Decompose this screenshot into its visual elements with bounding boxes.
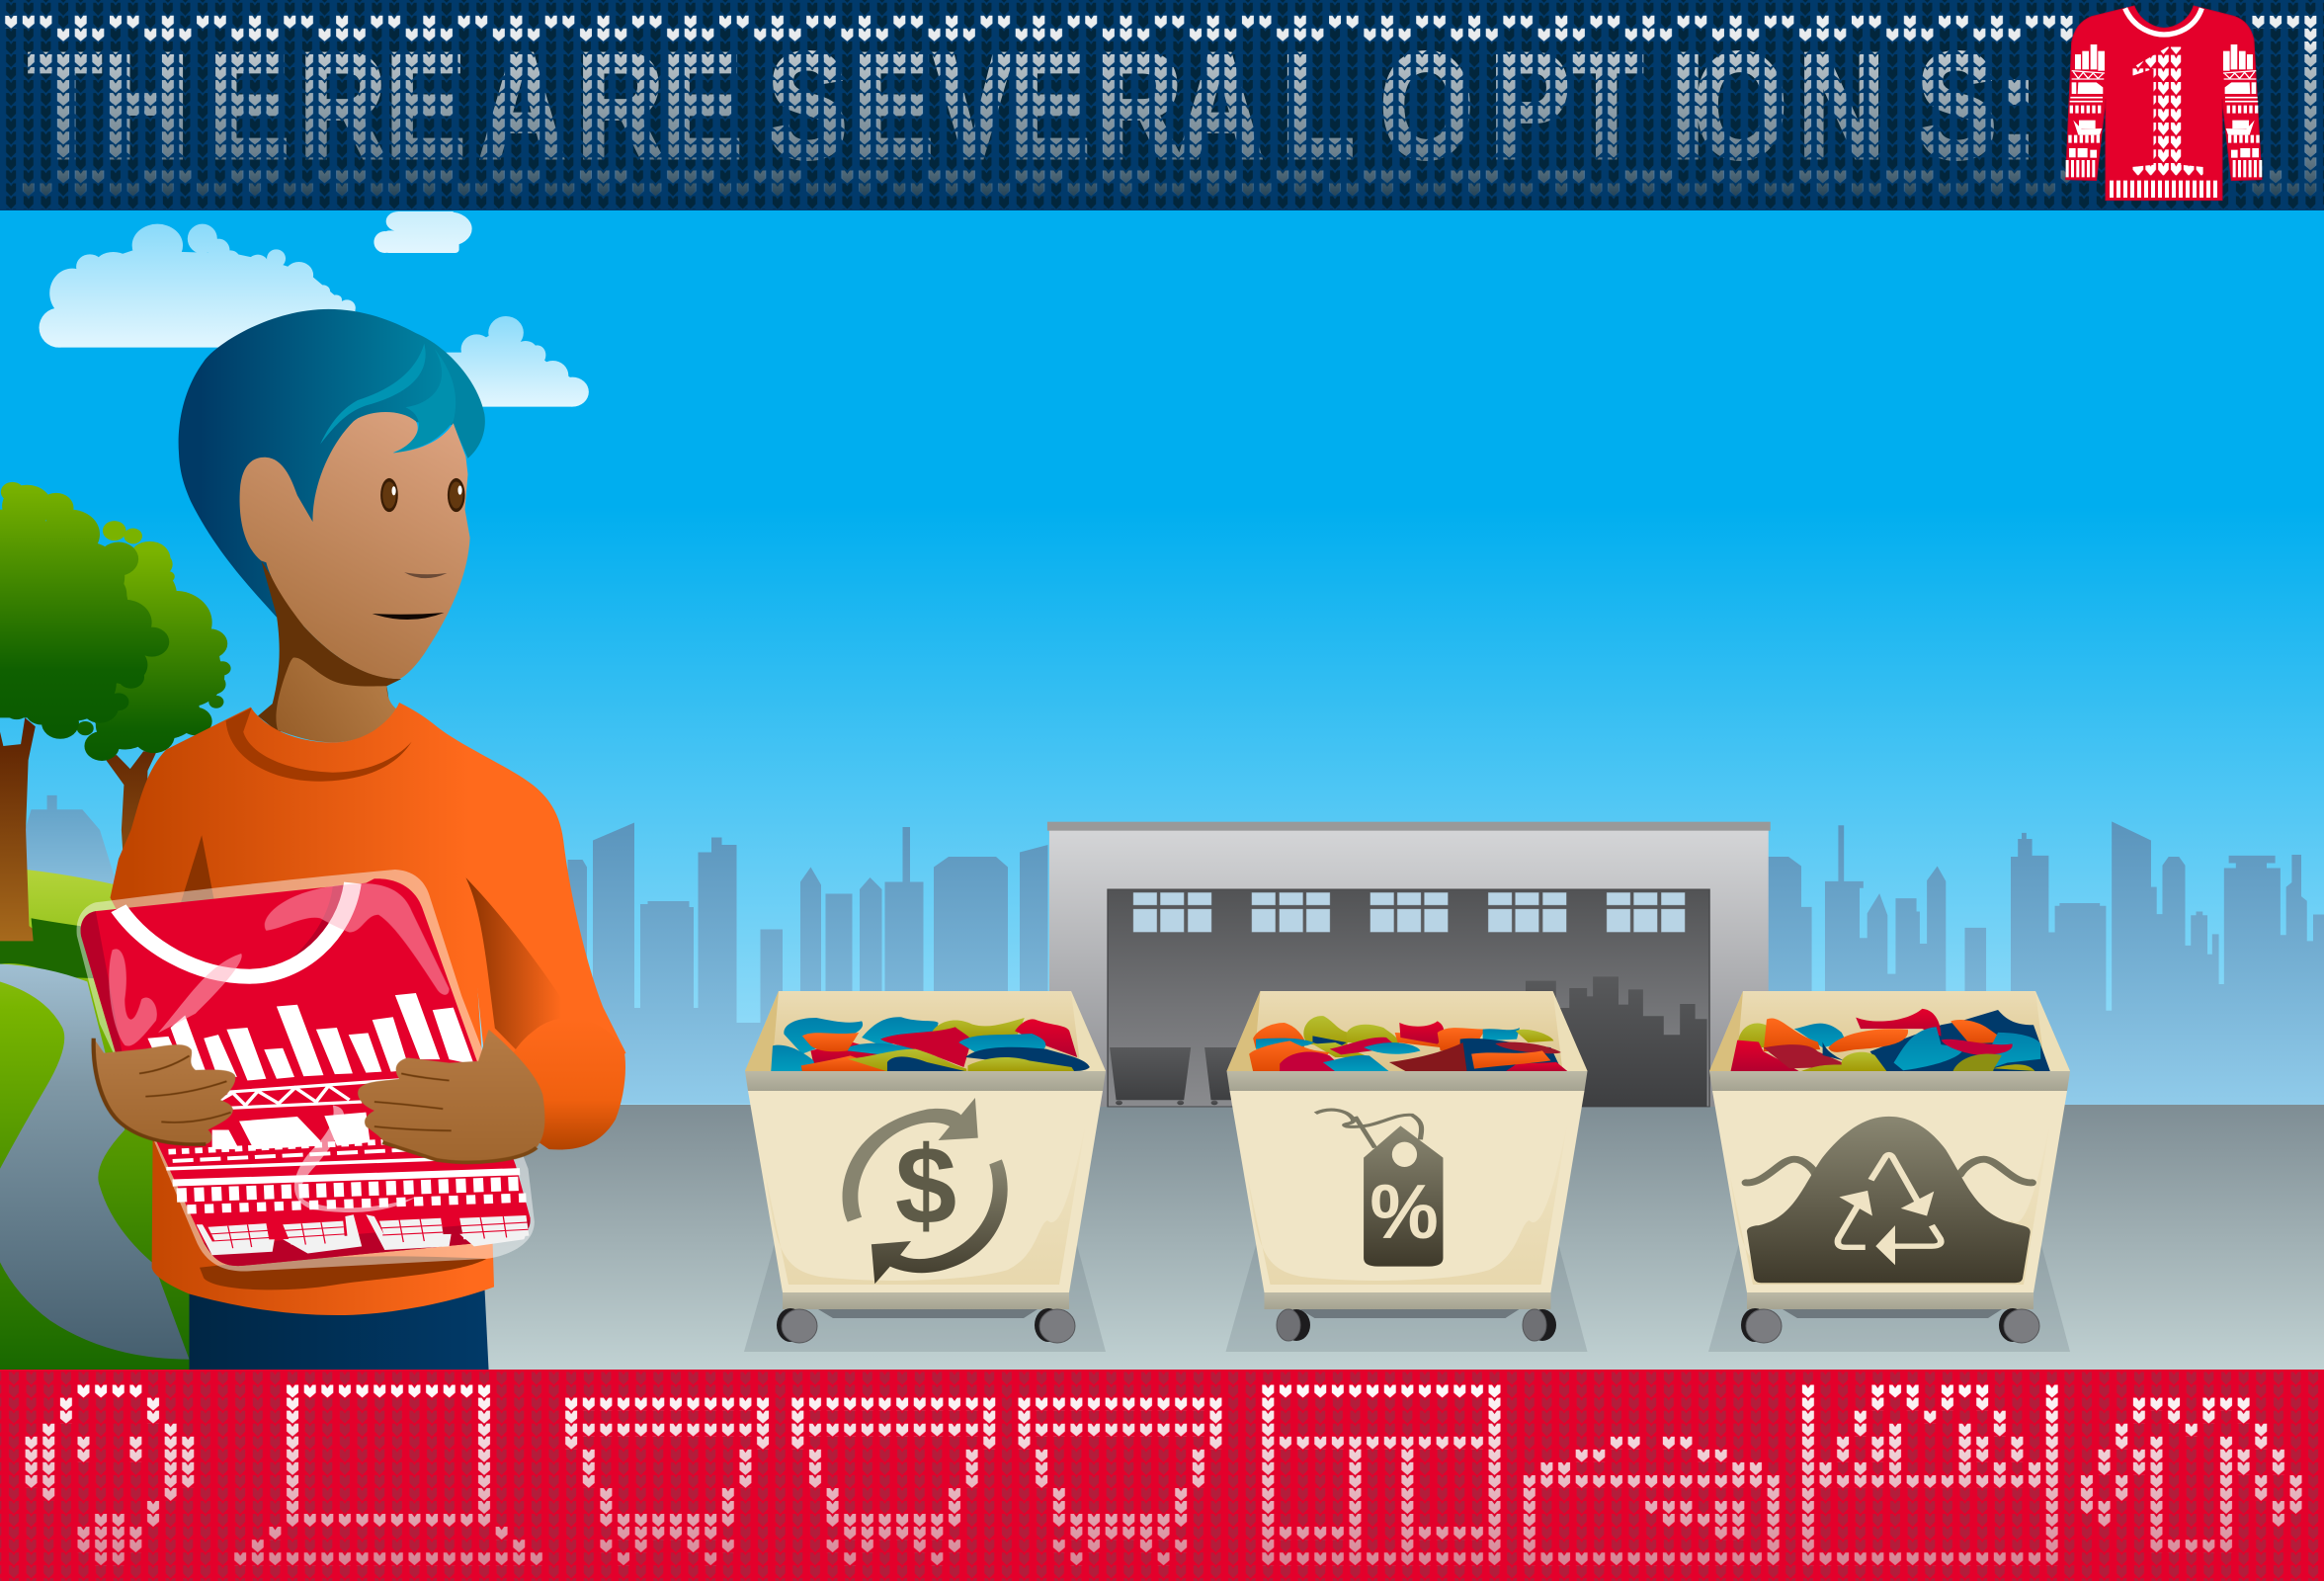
factory roof xyxy=(1047,822,1771,831)
hair highlights xyxy=(320,344,426,445)
bag highlights xyxy=(109,883,450,1212)
front hair lock xyxy=(393,349,456,454)
sky background xyxy=(0,209,2324,1105)
cloud: behind head xyxy=(442,316,589,407)
ground xyxy=(0,1105,2324,1371)
icon: price tag: % xyxy=(1370,1168,1439,1255)
right sleeve pattern xyxy=(2223,44,2262,169)
dark grass edge xyxy=(0,918,108,979)
sleeve inner shading xyxy=(465,877,574,1049)
road xyxy=(0,964,190,1360)
knit icon: shop doors xyxy=(1260,1385,1503,1565)
knit icon: head xyxy=(23,1385,197,1565)
skyline silhouette inside door xyxy=(1526,976,1707,1107)
left hand xyxy=(94,1039,235,1144)
bin 2 wheels xyxy=(1277,1309,1556,1341)
sweater collar xyxy=(2125,8,2201,35)
bin 2: discount xyxy=(1225,991,1587,1352)
factory wall xyxy=(1049,830,1769,1107)
jeans xyxy=(190,1286,489,1370)
front tree trunk xyxy=(0,717,60,950)
header band: knit background xyxy=(0,0,2324,210)
knit icon: shopping cart 2 xyxy=(789,1398,998,1565)
bin 3 wheels xyxy=(1741,1308,2039,1343)
shirt collar shadow xyxy=(226,707,412,782)
icon: recycling mound xyxy=(1746,1117,2033,1283)
neck shadow xyxy=(258,560,401,732)
sweater shape xyxy=(2066,6,2262,201)
house silhouette xyxy=(0,795,115,947)
footer band: knit background xyxy=(0,1370,2324,1581)
cloud: large left xyxy=(40,224,356,348)
factory door xyxy=(1108,889,1709,1107)
face xyxy=(240,412,470,679)
skyline: right xyxy=(1768,821,2324,1105)
left sleeve pattern xyxy=(2066,44,2105,169)
right hand xyxy=(358,1030,544,1162)
sweater trucks xyxy=(168,1113,416,1152)
sweater ships xyxy=(197,1214,529,1255)
left landscape: hill and road xyxy=(0,482,231,1370)
knit icon: shopping cart 1 xyxy=(562,1398,772,1565)
elbow xyxy=(512,1019,625,1149)
neck xyxy=(276,658,399,742)
mouth xyxy=(373,613,445,620)
sweater body xyxy=(81,878,531,1266)
green hill xyxy=(0,870,216,1370)
bin 1: buy-back xyxy=(744,991,1106,1352)
back tree trunk xyxy=(106,751,156,883)
sweater stripes and zigzag xyxy=(166,1149,526,1209)
shirt sleeve xyxy=(399,703,625,1159)
sweater hem xyxy=(2110,163,2220,214)
eyes xyxy=(380,478,465,512)
footer: knit pictograms xyxy=(23,1385,2304,1565)
icon: money cycle xyxy=(843,1098,1008,1284)
sweater dark edges xyxy=(81,884,531,1266)
bin 1 wheels xyxy=(777,1308,1075,1343)
numeral one: 1 xyxy=(2116,2,2213,217)
bin 1 clothes xyxy=(771,1017,1090,1071)
shirt torso xyxy=(111,703,494,1315)
knit icon: box xyxy=(1521,1437,1782,1565)
sweater chart bars xyxy=(147,993,474,1081)
skyline: left xyxy=(567,822,1047,1105)
header: knit stitches and title xyxy=(4,16,2317,196)
factory xyxy=(1047,822,1771,1107)
knit icon: laptop xyxy=(231,1385,545,1565)
bin 3: recycle xyxy=(1708,991,2070,1352)
icon: price tag xyxy=(1315,1110,1443,1267)
knit icon: clothes in frame xyxy=(1799,1385,2061,1565)
back tree foliage xyxy=(77,521,231,761)
hair xyxy=(179,309,485,618)
bag outline xyxy=(77,870,535,1272)
icon: money cycle: $ xyxy=(895,1123,956,1247)
sweater bridge truss xyxy=(166,1080,399,1111)
plastic bag with sweater xyxy=(77,870,544,1290)
person xyxy=(77,309,625,1370)
title: THERE ARE SEVERAL OPTIONS: xyxy=(29,22,2038,189)
nose xyxy=(404,572,447,578)
cloud: small top xyxy=(374,211,472,253)
sweater collar xyxy=(119,883,353,976)
bin 2 clothes xyxy=(1249,1016,1568,1071)
knit icon: shopping cart 3 xyxy=(1016,1398,1224,1565)
knit border rows xyxy=(4,16,2317,196)
front tree foliage xyxy=(0,482,169,739)
knit icon: sweater outline xyxy=(2078,1398,2304,1552)
small dark bins xyxy=(1110,1047,1286,1105)
factory windows xyxy=(1133,892,1685,932)
shirt fold under bag xyxy=(200,1256,486,1290)
icon: red sweater number one xyxy=(2066,2,2262,217)
bin 3 clothes xyxy=(1731,1009,2050,1071)
shirt dart xyxy=(181,835,214,902)
